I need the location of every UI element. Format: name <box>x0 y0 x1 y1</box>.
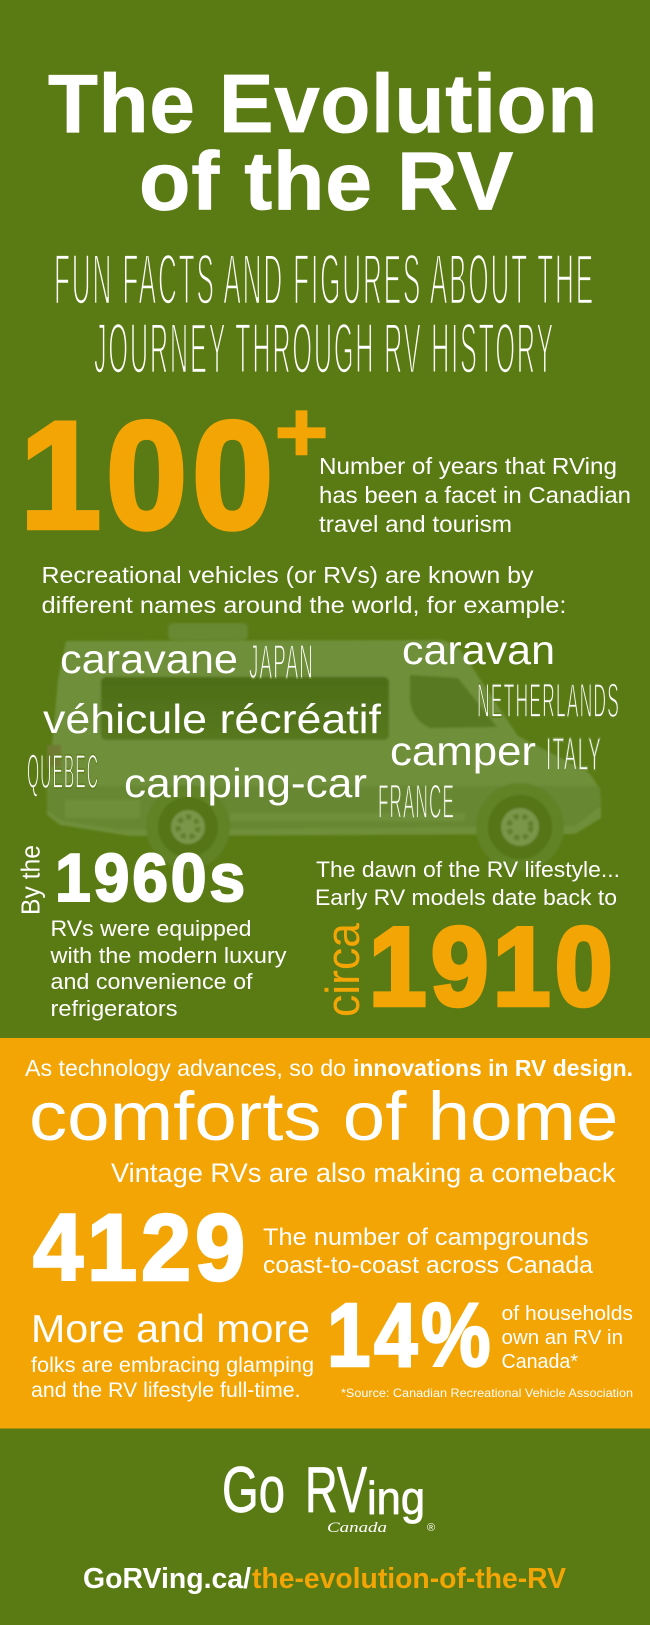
stat: 4129 campgrounds <box>33 1195 594 1301</box>
word cloud: names for RVs: QUEBEC <box>27 746 99 799</box>
stat: 4129 campgrounds: coast-to-coast across Canada <box>263 1252 594 1279</box>
stat: circa 1910: The dawn of the RV lifestyle... <box>316 857 620 882</box>
stat: 100+ years: Number of years that RVing <box>319 453 617 479</box>
text: more and more <box>31 1308 314 1402</box>
stat: by the 1960s <box>17 840 287 1021</box>
heading: technology advances: innovations in RV design. <box>353 1055 633 1081</box>
stat: by the 1960s: 1960s <box>55 840 248 916</box>
stat: 4129 campgrounds: 4129 <box>33 1195 249 1301</box>
word cloud: names for RVs: FRANCE <box>378 776 455 829</box>
heading: technology advances <box>25 1055 633 1081</box>
stat: 14 percent: of households <box>502 1303 633 1325</box>
website url <box>83 1563 567 1595</box>
text: more and more: folks are embracing glamping <box>31 1354 314 1377</box>
stat: circa 1910: Early RV models date back to <box>315 885 617 910</box>
stat: 100+ years: 100 <box>20 390 278 561</box>
logo: Go RVing Canada: Go <box>222 1453 285 1526</box>
text: more and more: and the RV lifestyle full-time. <box>31 1379 300 1402</box>
headline: comforts of home: comforts of home <box>29 1078 618 1155</box>
stat: circa 1910: 1910 <box>369 905 617 1029</box>
word cloud: names for RVs: véhicule récréatif <box>43 696 382 742</box>
word cloud: names for RVs: camper <box>390 728 536 774</box>
stat: by the 1960s: refrigerators <box>50 996 178 1021</box>
word cloud: names for RVs <box>27 627 620 829</box>
heading: technology advances: As technology advances, so do <box>25 1055 346 1081</box>
intro text: names around the world: different names around the world, for example: <box>42 592 566 618</box>
logo: Go RVing Canada: Canada <box>327 1520 387 1536</box>
title: of the RV <box>139 134 514 228</box>
stat: by the 1960s: RVs were equipped <box>50 916 252 941</box>
intro text: names around the world: Recreational vehicles (or RVs) are known by <box>42 562 534 588</box>
website url: GoRVing.ca/ <box>83 1563 251 1595</box>
source note: *Source: Canadian Recreational Vehicle Association <box>341 1386 633 1400</box>
stat: 14 percent <box>327 1286 633 1386</box>
text: vintage RVs: Vintage RVs are also making a comeback <box>111 1158 616 1188</box>
intro text: names around the world <box>42 562 566 618</box>
title <box>48 57 598 228</box>
word cloud: names for RVs: JAPAN <box>249 636 314 689</box>
stat: circa 1910: circa <box>316 922 369 1017</box>
stat: 100+ years <box>20 385 631 561</box>
logo: Go RVing Canada <box>222 1453 435 1536</box>
subtitle <box>54 241 595 389</box>
stat: 4129 campgrounds: The number of campgrounds <box>263 1224 588 1251</box>
stat: 100+ years: + <box>274 385 328 480</box>
logo: Go RVing Canada: ® <box>427 1522 435 1534</box>
text: more and more: More and more <box>31 1308 310 1351</box>
logo: Go RVing Canada: ing <box>367 1472 425 1524</box>
stat: 14 percent: own an RV in <box>502 1327 623 1349</box>
illustration: faded van <box>47 623 601 871</box>
word cloud: names for RVs: caravane <box>60 636 238 682</box>
panel: innovations <box>0 1038 650 1428</box>
title: The Evolution <box>48 57 598 150</box>
stat: 14 percent: 14% <box>327 1286 494 1386</box>
stat: 100+ years: travel and tourism <box>319 511 512 537</box>
logo: Go RVing Canada: RV <box>305 1453 367 1526</box>
stat: by the 1960s: By the <box>17 845 45 915</box>
stat: by the 1960s: with the modern luxury <box>49 943 286 968</box>
website url: the-evolution-of-the-RV <box>252 1563 567 1595</box>
stat: 100+ years: has been a facet in Canadian <box>319 482 631 508</box>
word cloud: names for RVs: caravan <box>402 627 555 673</box>
stat: 14 percent: Canada* <box>502 1351 578 1373</box>
stat: circa 1910 <box>315 857 620 1029</box>
word cloud: names for RVs: camping-car <box>124 760 367 806</box>
stat: by the 1960s: and convenience of <box>50 969 253 994</box>
